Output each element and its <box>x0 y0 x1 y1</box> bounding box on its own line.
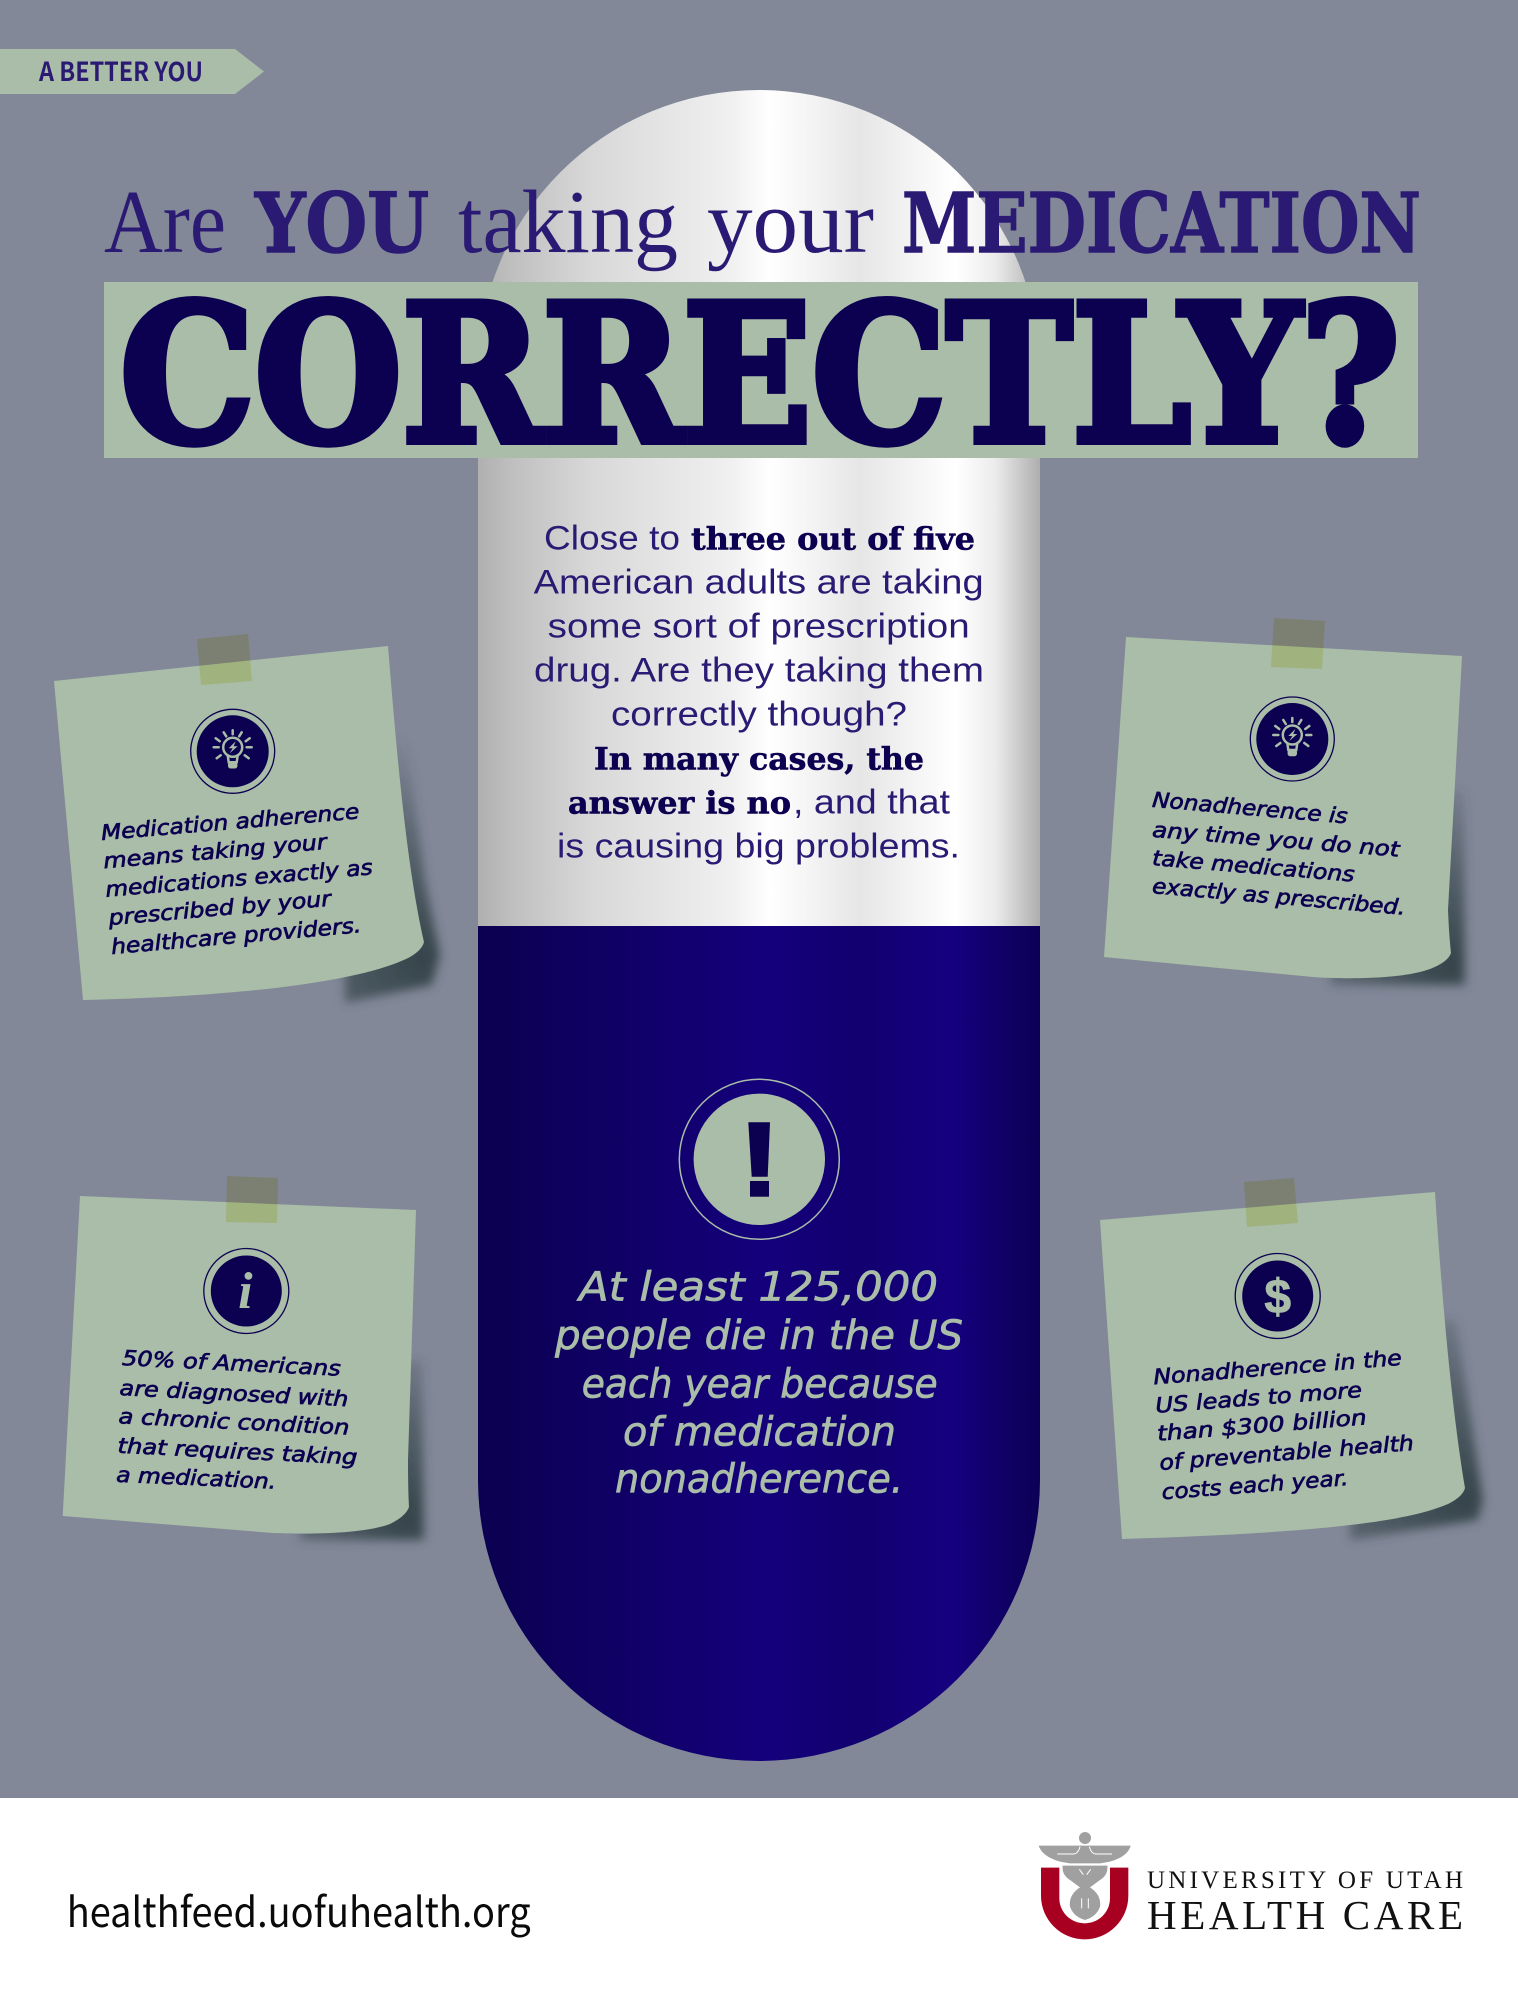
panel: note nonadherence definition <box>1104 618 1465 985</box>
callout: deaths statistic <box>554 1265 963 1503</box>
title: YOU <box>254 176 429 272</box>
text block: medication adherence: prescribed by your <box>107 887 333 930</box>
title: Are <box>104 173 226 272</box>
text block: intro: is causing big problems. <box>557 827 960 865</box>
text block: medication adherence: medications exactly as <box>104 855 374 902</box>
text block: intro: American adults are taking <box>534 563 984 601</box>
text block: chronic condition: a chronic condition <box>118 1404 350 1440</box>
icon: exclamation mark <box>679 1079 839 1239</box>
text block: preventable costs: costs each year. <box>1161 1466 1349 1504</box>
text block: preventable costs: of preventable health <box>1159 1431 1415 1475</box>
title: your <box>707 173 874 272</box>
text block: medication adherence: Medication adherence <box>100 799 360 845</box>
callout: deaths statistic: nonadherence. <box>615 1457 903 1503</box>
text block: intro: correctly though? <box>611 695 907 733</box>
logo: university of utah health care <box>1039 1832 1463 1939</box>
callout: deaths statistic: each year because <box>582 1362 938 1408</box>
title: MEDICATION <box>902 176 1421 272</box>
panel: note preventable costs <box>1100 1178 1483 1540</box>
icon: light bulb <box>191 709 275 793</box>
text block: preventable costs: Nonadherence in the <box>1153 1346 1403 1389</box>
icon: dollar sign: $ <box>1264 1271 1291 1324</box>
footer panel <box>0 1798 1518 1998</box>
icon: light bulb <box>1250 697 1334 781</box>
title <box>104 173 1421 272</box>
panel: pill capsule <box>478 90 1040 1761</box>
text block: intro: , and that <box>793 783 951 821</box>
title: taking <box>458 173 678 272</box>
heading banner: correctly: CORRECTLY? <box>120 263 1400 486</box>
text block: nonadherence definition <box>1151 788 1406 920</box>
text block: chronic condition: that requires taking <box>117 1434 358 1469</box>
text block: intro: some sort of prescription <box>548 607 970 645</box>
text block: intro: Close to <box>544 519 680 557</box>
text block: preventable costs: US leads to more <box>1155 1378 1363 1418</box>
callout: deaths statistic: of medication <box>623 1410 896 1456</box>
text block: chronic condition: are diagnosed with <box>119 1376 349 1411</box>
text block: nonadherence definition: take medications <box>1151 846 1356 887</box>
text block: intro: three out of five <box>691 521 975 557</box>
website url: healthfeed.uofuhealth.org <box>67 1879 531 1939</box>
text block: preventable costs: than $300 billion <box>1156 1405 1367 1446</box>
text block: preventable costs <box>1153 1346 1415 1504</box>
text block: nonadherence definition: exactly as prescribed. <box>1151 874 1406 920</box>
panel: note chronic condition <box>63 1176 424 1540</box>
text block: chronic condition <box>116 1346 358 1494</box>
text block: intro: answer is no <box>568 785 791 821</box>
text block: medication adherence: means taking your <box>102 830 329 873</box>
logo: university of utah health care: UNIVERSITY OF UTAH <box>1147 1867 1463 1894</box>
panel: note medication adherence <box>54 634 440 1003</box>
text block: medication adherence <box>100 799 374 959</box>
text block: intro: In many cases, the <box>594 741 924 777</box>
tag: a better you: A BETTER YOU <box>38 52 203 89</box>
text block: chronic condition: a medication. <box>116 1463 277 1494</box>
logo: university of utah health care: HEALTH CARE <box>1147 1892 1463 1938</box>
icon: information: i <box>238 1263 253 1320</box>
text block: intro: drug. Are they taking them <box>534 651 984 689</box>
callout: deaths statistic: people die in the US <box>554 1313 963 1359</box>
text block: nonadherence definition: Nonadherence is <box>1151 788 1349 828</box>
text block: chronic condition: 50% of Americans <box>121 1346 341 1381</box>
icon: red U with caduceus <box>1039 1832 1131 1939</box>
icon: information <box>204 1248 289 1334</box>
callout: deaths statistic: At least 125,000 <box>576 1265 938 1311</box>
text block: medication adherence: healthcare providers. <box>110 913 362 959</box>
tag: a better you <box>0 49 264 94</box>
text block: nonadherence definition: any time you do not <box>1151 818 1401 862</box>
icon: dollar sign <box>1235 1254 1320 1338</box>
text block: intro <box>534 519 984 865</box>
